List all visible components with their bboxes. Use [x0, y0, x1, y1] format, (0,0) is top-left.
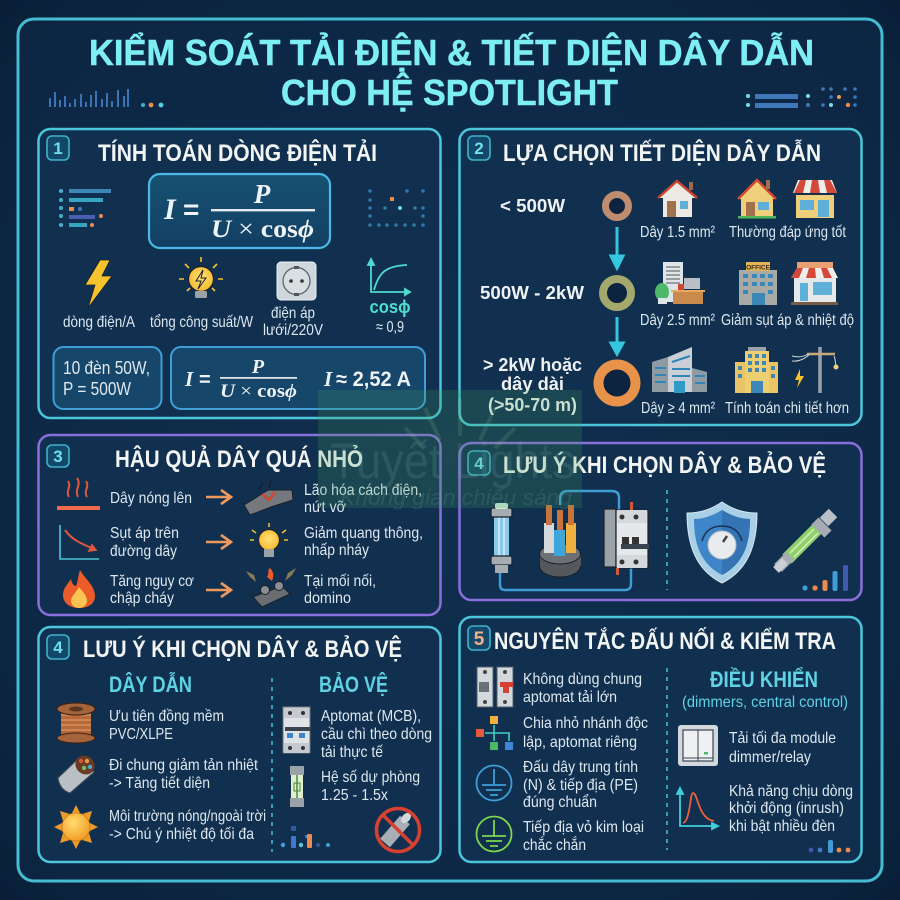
text: không dùng chung: aptomat tải lớn [523, 689, 617, 706]
icon: house yellow [738, 180, 776, 218]
panel 4 right: lưu ý hình minh họa [460, 443, 862, 600]
panel 5: nguyên tắc đấu nối và kiểm tra [460, 617, 862, 862]
label: tổng công suất: tổng công suất/W [150, 313, 254, 331]
text: hệ số dự phòng: 1.25 - 1.5x [321, 787, 388, 804]
decoration: bars [809, 840, 850, 853]
icon: heat [57, 478, 100, 510]
label: lão hóa [304, 482, 422, 516]
icon: house white [658, 181, 697, 217]
label row 2: Dây 2.5 mm² [640, 312, 716, 329]
text: chia nhỏ nhánh: Chia nhỏ nhánh độc [523, 715, 648, 732]
label: trên 2kW: (>50-70 m) [488, 395, 577, 415]
badge 4 right: 4 [474, 454, 484, 473]
arrow 2 [611, 317, 623, 354]
icon: shield knob [687, 502, 757, 583]
label: trên 2kW [483, 355, 582, 415]
example box: kết quả: P [251, 356, 265, 378]
text: tải tối đa: Tải tối đa module [729, 730, 836, 747]
arrow a [206, 490, 231, 504]
icon: yellow building [735, 347, 778, 393]
subheading: bảo vệ: BẢO VỆ [319, 672, 388, 697]
label: mối nối: Tại mối nối, [304, 573, 376, 590]
title: KIỂM SOÁT TẢI ĐIỆN & TIẾT DIỆN DÂY DẪN [89, 31, 814, 73]
text: tiếp địa [523, 819, 644, 854]
label: lão hóa: Lão hóa cách điện, [304, 482, 422, 499]
badge 4 right [468, 451, 490, 475]
text: tiếp địa: Tiếp địa vỏ kim loại [523, 819, 644, 836]
text: aptomat: cầu chì theo dòng [321, 726, 432, 743]
label: trên 2kW: > 2kW hoặc [483, 355, 582, 375]
text: đi chung [109, 757, 258, 792]
text: đấu dây: Đấu dây trung tính [523, 759, 638, 776]
label: dòng điện: dòng điện/A [63, 314, 135, 331]
text: môi trường [109, 808, 266, 843]
icon: multicore cable [58, 752, 98, 793]
label: mối nối [304, 573, 376, 607]
example box: kết quả [171, 347, 425, 409]
text: ưu tiên đồng mềm: PVC/XLPE [109, 726, 173, 743]
label: chập cháy [110, 573, 194, 607]
arrow 1 [611, 227, 623, 268]
icon: copper spool [57, 703, 95, 743]
subheading: điều khiển: ĐIỀU KHIỂN [710, 667, 818, 692]
text: hệ số dự phòng: Hệ số dự phòng [321, 769, 420, 786]
ring: 1.5 mm2 [606, 194, 628, 218]
icon: glass fuse [491, 503, 512, 573]
label: điện áp [263, 305, 323, 339]
example box: kết quả: I [323, 367, 333, 391]
heading 1: TÍNH TOÁN DÒNG ĐIỆN TẢI [98, 138, 377, 167]
label row 2 [640, 312, 854, 329]
formula box: P [253, 179, 271, 209]
badge 4 left: 4 [53, 638, 63, 657]
badge 3: 3 [53, 447, 63, 466]
icon: two breakers [477, 667, 513, 707]
label: điện áp: điện áp [271, 305, 315, 322]
example box: 10 đèn [54, 347, 162, 409]
text: đấu dây [523, 759, 638, 811]
text: chia nhỏ nhánh [523, 715, 648, 751]
decoration: title left equalizer [50, 89, 163, 107]
text: đấu dây: đúng chuẩn [523, 793, 597, 811]
badge 2: 2 [474, 139, 484, 158]
label row 1 [640, 224, 846, 241]
text: tiếp địa: chắc chắn [523, 835, 586, 854]
label: cos phi: cosϕ [370, 297, 410, 317]
icon: inrush chart [677, 788, 718, 829]
label: chập cháy: chập cháy [110, 590, 174, 607]
example box: kết quả: I [184, 367, 194, 391]
label: sụt áp: Sụt áp trên [110, 525, 179, 542]
icon: cracked cable [244, 481, 293, 515]
label: giảm quang thông [304, 525, 423, 559]
title: CHO HỆ SPOTLIGHT [281, 71, 618, 113]
ring: 2.5 mm2 [603, 279, 631, 307]
icon: domino [246, 568, 296, 607]
label: cos phi [370, 297, 410, 336]
label: sụt áp [110, 525, 179, 560]
divider [666, 490, 668, 590]
label row 1: Dây 1.5 mm² [640, 224, 716, 241]
decoration: title right bars and dots [746, 87, 857, 108]
text: ưu tiên đồng mềm: Ưu tiên đồng mềm [109, 708, 224, 725]
decoration: right dot grid [368, 189, 425, 227]
label: chập cháy: Tăng nguy cơ [110, 573, 194, 590]
icon: dim bulb [250, 523, 288, 557]
heading 4 left: LƯU Ý KHI CHỌN DÂY & BẢO VỆ [83, 634, 402, 663]
heading 5: NGUYÊN TẮC ĐẤU NỐI & KIỂM TRA [494, 627, 836, 655]
label: trên 2kW: dây dài [501, 374, 564, 394]
text: tải tối đa [729, 730, 836, 766]
label: 500W-2kW: 500W - 2kW [480, 283, 584, 303]
label: dưới 500W: < 500W [500, 196, 565, 216]
text: aptomat: tải thực tế [321, 744, 383, 761]
text: hệ số dự phòng [321, 769, 420, 804]
divider [271, 678, 273, 852]
icon: shop [793, 180, 837, 218]
subheading: dây dẫn: DÂY DẪN [109, 671, 192, 697]
icon: office building: OFFICE [746, 264, 771, 272]
label row 3: Dây ≥ 4 mm² [641, 400, 716, 417]
icon: voltage drop chart [60, 525, 99, 559]
text: khả năng chịu dòng: khởi động (inrush) [729, 800, 844, 817]
icon: branch network [476, 716, 513, 750]
watermark [318, 390, 582, 510]
badge 5: 5 [474, 629, 485, 650]
arrow c [206, 583, 231, 597]
formula box: I [163, 193, 177, 226]
wiring [500, 491, 631, 590]
icon: sun [54, 805, 98, 849]
badge 1 [47, 136, 69, 160]
panel 4 left: lưu ý khi chọn dây và bảo vệ [38, 627, 440, 862]
text: đấu dây: (N) & tiếp địa (PE) [523, 777, 638, 794]
label: giảm quang thông: nhấp nháy [304, 542, 369, 559]
label: cos phi: ≈ 0,9 [376, 319, 404, 336]
icon: office desk [655, 262, 705, 304]
subheading: điều khiển: (dimmers, central control) [682, 694, 848, 711]
icon: cable [540, 505, 581, 577]
icon: flame [63, 570, 95, 608]
label: mối nối: domino [304, 590, 351, 607]
badge 2 [468, 136, 490, 160]
divider [666, 668, 668, 850]
label row 2: Giảm sụt áp & nhiệt độ [721, 312, 854, 329]
heading 4 right: LƯU Ý KHI CHỌN DÂY & BẢO VỆ [503, 450, 826, 479]
text: aptomat [321, 708, 432, 761]
panel 2: lựa chọn tiết diện [460, 129, 862, 425]
label: giảm quang thông: Giảm quang thông, [304, 525, 423, 542]
icon: MCB small [283, 707, 311, 753]
text: môi trường: Môi trường nóng/ngoài trời [109, 808, 266, 825]
icon: tower [652, 347, 707, 393]
label row 1: Thường đáp ứng tốt [729, 224, 846, 241]
formula box: U × cosϕ [211, 216, 314, 243]
label row 3 [641, 400, 849, 417]
arrow b [206, 535, 231, 549]
decoration: bars [281, 826, 330, 848]
label row 3: Tính toán chi tiết hơn [725, 400, 849, 417]
panel 3: hậu quả dây quá nhỏ [38, 435, 440, 615]
text: chia nhỏ nhánh: lập, aptomat riêng [523, 734, 637, 751]
label: điện áp: lưới/220V [263, 322, 323, 339]
icon: green fuse [776, 513, 833, 570]
icon: socket [277, 262, 316, 300]
label: dây nóng lên: Dây nóng lên [110, 490, 192, 507]
icon: office building [739, 262, 777, 305]
heading 3: HẬU QUẢ DÂY QUÁ NHỎ [115, 444, 363, 473]
decoration: left list [59, 189, 111, 227]
icon: bulb [179, 257, 223, 298]
icon: bolt [85, 260, 112, 308]
text: khả năng chịu dòng: Khả năng chịu dòng [729, 783, 853, 800]
badge 5 [468, 626, 490, 650]
text: tải tối đa: dimmer/relay [729, 749, 811, 766]
subheading: điều khiển [682, 667, 848, 711]
text: khả năng chịu dòng: khi bật nhiều đèn [729, 818, 835, 835]
example box: kết quả: U × cosϕ [220, 381, 297, 402]
text: đi chung: Đi chung giảm tản nhiệt [109, 757, 258, 774]
example box: 10 đèn: P = 500W [63, 379, 131, 399]
text: aptomat: Aptomat (MCB), [321, 708, 421, 725]
decoration: signal bars [802, 565, 848, 591]
heading 2: LỰA CHỌN TIẾT DIỆN DÂY DẪN [503, 138, 821, 167]
icon: fuse small [290, 766, 304, 807]
icon: ground blue [476, 766, 512, 800]
watermark: Tuyết Lights [330, 433, 575, 489]
text: khả năng chịu dòng [729, 783, 853, 835]
formula box [149, 174, 330, 248]
icon: power pole [792, 347, 838, 393]
badge 4 left [47, 635, 69, 659]
panel 1: tính toán dòng điện tải [38, 129, 440, 418]
title [89, 31, 814, 113]
example box: 10 đèn: 10 đèn 50W, [63, 358, 150, 378]
label: sụt áp: đường dây [110, 543, 177, 560]
icon: ground green [476, 816, 512, 852]
text: ưu tiên đồng mềm [109, 708, 224, 743]
badge 1: 1 [53, 139, 63, 158]
ring: 4 mm2 [598, 364, 636, 402]
formula box: = [183, 194, 199, 225]
watermark: Không gian chiếu sáng [340, 485, 573, 510]
icon: cos graph [368, 259, 410, 295]
example box: kết quả: ≈ 2,52 A [336, 368, 411, 391]
text: không dùng chung: Không dùng chung [523, 671, 642, 688]
icon: MCB [604, 502, 649, 575]
text: môi trường: -> Chú ý nhiệt độ tối đa [109, 826, 254, 843]
text: đi chung: -> Tăng tiết diện [109, 775, 210, 792]
example box: kết quả: = [199, 369, 211, 391]
icon: dimmer switch [678, 725, 718, 766]
icon: shop large [791, 262, 838, 305]
badge 3 [47, 445, 69, 467]
text: không dùng chung [523, 671, 642, 706]
label: lão hóa: nứt vỡ [304, 499, 346, 516]
icon: no-fuse sign [376, 808, 420, 852]
